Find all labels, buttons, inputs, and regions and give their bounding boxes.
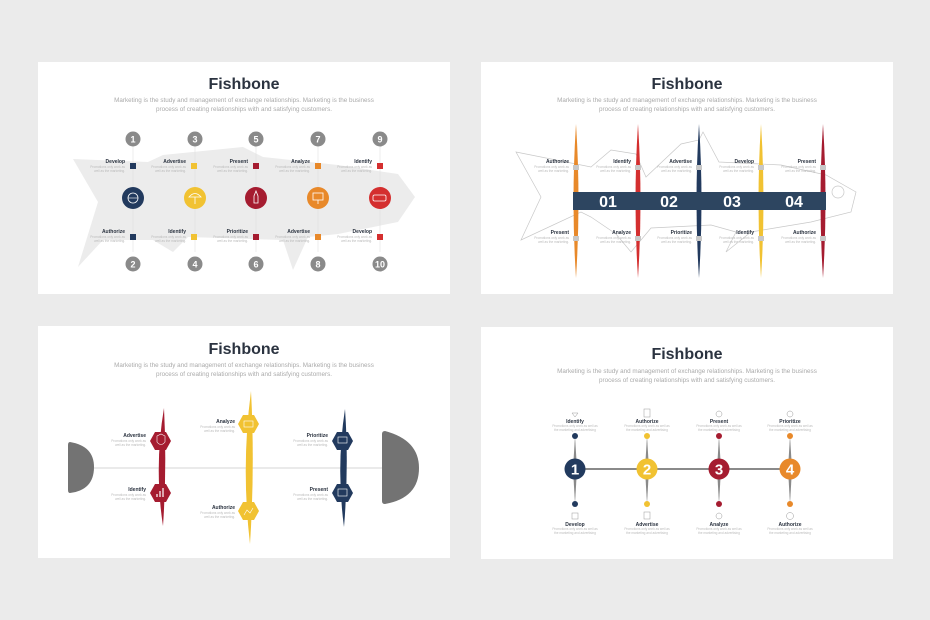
labels: Promotions only work as: [534, 165, 569, 169]
labels: well as the marketing.: [723, 169, 754, 173]
spine yellow: [238, 391, 259, 544]
labels: Promotions only work as: [111, 493, 146, 497]
numbered markers bottom: 4: [192, 260, 198, 270]
numbered band: 01: [599, 194, 617, 211]
numbered markers bottom: 10: [375, 260, 385, 270]
labels top: well as the marketing.: [341, 169, 372, 173]
labels: well as the marketing.: [600, 169, 631, 173]
labels: well as the marketing.: [297, 497, 328, 501]
numbered markers top: 7: [315, 134, 321, 144]
labels top: Promotions only work as: [337, 165, 372, 169]
labels bottom: Authorize: [102, 229, 125, 235]
labels: well as the marketing.: [661, 240, 692, 244]
labels: Promotions only work as: [293, 493, 328, 497]
numbered markers top: 5: [253, 134, 259, 144]
labels top: Present: [230, 159, 248, 165]
labels: Prioritize: [307, 433, 328, 439]
numbered markers bottom: 6: [253, 260, 259, 270]
labels top: well as the marketing.: [94, 169, 125, 173]
labels bottom: Develop: [565, 522, 585, 528]
labels: well as the marketing.: [115, 497, 146, 501]
labels top: Develop: [106, 159, 125, 165]
numbered markers top: 1: [130, 134, 136, 144]
labels bottom: Promotions only work as well as: [767, 527, 813, 531]
labels: Promotions only work as: [781, 236, 816, 240]
subtitle: process of creating relationships with and satisfying customers.: [599, 377, 775, 384]
numbered circles: 4: [786, 462, 795, 478]
numbered circles: [564, 458, 800, 480]
labels bottom: the marketing and advertising: [698, 531, 740, 535]
labels: well as the marketing.: [204, 515, 235, 519]
panel: slide 4 numbered timeline: [481, 327, 893, 559]
labels: Promotions only work as: [200, 425, 235, 429]
labels bottom: Promotions only work as: [90, 235, 125, 239]
labels bottom: [90, 229, 383, 243]
panel: slide 3 hexagon spines: [38, 326, 450, 558]
labels bottom: well as the marketing.: [155, 239, 186, 243]
labels top: Advertise: [163, 159, 186, 165]
labels top: Promotions only work as well as: [552, 424, 598, 428]
labels: Promotions only work as: [293, 439, 328, 443]
labels: Promotions only work as: [781, 165, 816, 169]
labels: Advertise: [669, 159, 692, 165]
labels bottom: Promotions only work as: [213, 235, 248, 239]
subtitle: Marketing is the study and management of exchange relationships. Marketing is the business: [557, 97, 817, 104]
labels bottom: Prioritize: [227, 229, 248, 235]
subtitle: [114, 97, 374, 113]
labels bottom: Advertise: [287, 229, 310, 235]
labels: [534, 159, 816, 244]
labels top: Prioritize: [779, 419, 801, 425]
labels: well as the marketing.: [723, 240, 754, 244]
labels: Analyze: [216, 419, 235, 425]
labels: Promotions only work as: [657, 236, 692, 240]
title: Fishbone: [208, 76, 280, 93]
labels: Identify: [613, 159, 631, 165]
subtitle: Marketing is the study and management of exchange relationships. Marketing is the business: [114, 97, 374, 104]
numbered band: 04: [785, 194, 803, 211]
small icons: [572, 409, 794, 520]
labels: Authorize: [793, 230, 816, 236]
subtitle: process of creating relationships with and satisfying customers.: [156, 106, 332, 113]
labels: well as the marketing.: [204, 429, 235, 433]
subtitle: process of creating relationships with and satisfying customers.: [156, 371, 332, 378]
labels top: the marketing and advertising: [698, 428, 740, 432]
labels: Authorize: [546, 159, 569, 165]
labels: Develop: [735, 159, 754, 165]
labels: well as the marketing.: [115, 443, 146, 447]
labels bottom: well as the marketing.: [217, 239, 248, 243]
spines: [574, 124, 826, 278]
numbered band: [573, 192, 826, 211]
numbered markers top: [126, 132, 388, 252]
labels: Identify: [128, 487, 146, 493]
numbered circles: 3: [715, 462, 723, 478]
labels: Promotions only work as: [596, 236, 631, 240]
icon circles: [122, 187, 391, 209]
title: Fishbone: [651, 76, 723, 93]
labels top: Promotions only work as well as: [767, 424, 813, 428]
labels top: the marketing and advertising: [554, 428, 596, 432]
connector squares: [573, 165, 826, 241]
labels: Promotions only work as: [200, 511, 235, 515]
labels bottom: the marketing and advertising: [626, 531, 668, 535]
labels top: Identify: [566, 419, 584, 425]
labels top: [552, 419, 813, 432]
labels top: Promotions only work as: [90, 165, 125, 169]
subtitle: Marketing is the study and management of exchange relationships. Marketing is the business: [114, 362, 374, 369]
labels top: well as the marketing.: [279, 169, 310, 173]
tail and head shapes: [68, 431, 419, 504]
backbone line: [94, 467, 382, 469]
numbered band: 03: [723, 194, 741, 211]
labels bottom: Promotions only work as: [151, 235, 186, 239]
subtitle: [557, 368, 817, 384]
labels top: Identify: [354, 159, 372, 165]
labels top: Promotions only work as: [213, 165, 248, 169]
labels: well as the marketing.: [297, 443, 328, 447]
labels: Present: [798, 159, 816, 165]
labels bottom: Identify: [168, 229, 186, 235]
labels top: Analyze: [291, 159, 310, 165]
labels bottom: Promotions only work as well as: [696, 527, 742, 531]
labels: Promotions only work as: [534, 236, 569, 240]
panel: slide 1 fish with numbered items: [38, 62, 450, 294]
labels: well as the marketing.: [538, 240, 569, 244]
labels bottom: [552, 522, 813, 535]
labels: Present: [551, 230, 569, 236]
labels: Present: [310, 487, 328, 493]
labels: well as the marketing.: [661, 169, 692, 173]
labels: Promotions only work as: [719, 165, 754, 169]
subtitle: [114, 362, 374, 378]
labels: Promotions only work as: [111, 439, 146, 443]
subtitle: [557, 97, 817, 113]
labels bottom: Develop: [353, 229, 372, 235]
title: Fishbone: [208, 341, 280, 358]
labels top: Authorize: [635, 419, 659, 425]
numbered markers top: 3: [192, 134, 198, 144]
spine red: [150, 408, 171, 526]
labels bottom: well as the marketing.: [94, 239, 125, 243]
numbered markers top: 9: [377, 134, 383, 144]
labels top: the marketing and advertising: [626, 428, 668, 432]
labels bottom: Promotions only work as well as: [552, 527, 598, 531]
labels: Promotions only work as: [719, 236, 754, 240]
labels: Authorize: [212, 505, 235, 511]
labels bottom: Advertise: [636, 522, 659, 528]
labels bottom: Analyze: [710, 522, 729, 528]
labels: Promotions only work as: [596, 165, 631, 169]
numbered markers bottom: 8: [315, 260, 321, 270]
labels: Identify: [736, 230, 754, 236]
labels top: well as the marketing.: [217, 169, 248, 173]
labels top: Promotions only work as well as: [696, 424, 742, 428]
numbered markers bottom: 2: [130, 260, 136, 270]
labels: Analyze: [612, 230, 631, 236]
fish silhouette: [73, 147, 415, 270]
numbered band: 02: [660, 194, 678, 211]
labels bottom: well as the marketing.: [279, 239, 310, 243]
labels: [111, 419, 328, 519]
labels top: Promotions only work as: [151, 165, 186, 169]
fish outline: [516, 132, 856, 252]
labels bottom: Promotions only work as: [275, 235, 310, 239]
title: Fishbone: [651, 346, 723, 363]
labels: well as the marketing.: [538, 169, 569, 173]
labels bottom: the marketing and advertising: [769, 531, 811, 535]
panel: slide 2 fish outline with spines: [481, 62, 893, 294]
labels top: Promotions only work as well as: [624, 424, 670, 428]
subtitle: process of creating relationships with and satisfying customers.: [599, 106, 775, 113]
labels top: well as the marketing.: [155, 169, 186, 173]
labels top: Present: [710, 419, 729, 425]
labels top: the marketing and advertising: [769, 428, 811, 432]
labels: Promotions only work as: [657, 165, 692, 169]
numbered circles: 2: [643, 462, 651, 478]
labels: Advertise: [123, 433, 146, 439]
labels bottom: Authorize: [778, 522, 802, 528]
labels: Prioritize: [671, 230, 692, 236]
labels: well as the marketing.: [785, 240, 816, 244]
ribs and nodes: [572, 433, 793, 507]
numbered markers bottom: [126, 256, 388, 272]
spine navy: [332, 409, 353, 527]
labels top: [90, 159, 383, 173]
labels: well as the marketing.: [785, 169, 816, 173]
labels bottom: well as the marketing.: [341, 239, 372, 243]
backbone: [575, 468, 790, 470]
labels bottom: Promotions only work as: [337, 235, 372, 239]
numbered circles: 1: [571, 462, 579, 478]
labels: well as the marketing.: [600, 240, 631, 244]
labels bottom: the marketing and advertising: [554, 531, 596, 535]
subtitle: Marketing is the study and management of exchange relationships. Marketing is the business: [557, 368, 817, 375]
labels top: Promotions only work as: [275, 165, 310, 169]
labels bottom: Promotions only work as well as: [624, 527, 670, 531]
